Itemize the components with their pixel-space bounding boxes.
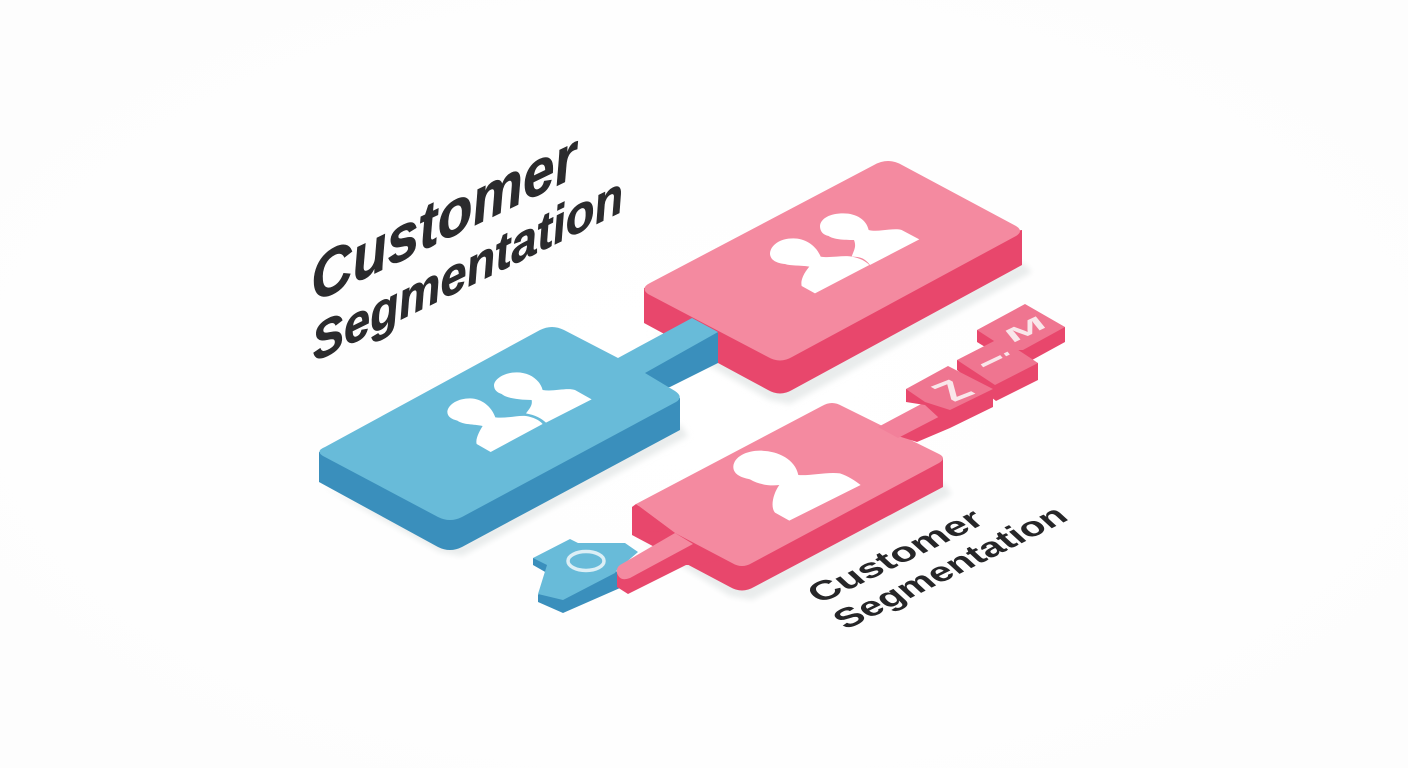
secondary label: Customer Segmentation: Segmentation (824, 499, 1075, 635)
panel: blue segment block (319, 318, 718, 556)
blue block top face with connector (319, 318, 718, 520)
lower pink block side faces (632, 458, 943, 590)
main title: Customer Segmentation: Customer (308, 119, 582, 317)
main title: Customer Segmentation: Segmentation (310, 165, 626, 373)
panel: tile with letter M (977, 304, 1065, 365)
icon: circle on blue tile (568, 552, 604, 570)
icon: two people on blue block (447, 372, 592, 452)
panel: tile with letter Z (906, 366, 993, 428)
tile glyph Z: Z (920, 375, 985, 407)
lower pink block top face (636, 403, 943, 566)
panel: lower pink segment block (632, 403, 952, 600)
pink block top face (644, 161, 1020, 360)
blue block side faces (319, 398, 680, 550)
secondary label: Customer Segmentation: Customer (798, 502, 992, 609)
left connector of lower pink block (617, 533, 720, 594)
tile glyph i: i (971, 348, 1016, 373)
panel: tile with letter i (957, 338, 1038, 401)
panel: large pink segment block (644, 161, 1032, 404)
tile glyph M: M (1000, 311, 1051, 347)
right connector to letter tiles (878, 402, 952, 442)
pink block side faces (644, 230, 1022, 394)
icon: single person on lower pink block (733, 451, 861, 521)
icon: two people on pink block (770, 213, 919, 293)
blue connector side (640, 331, 718, 392)
icon: small blue house-shaped tile with circle (533, 539, 638, 613)
